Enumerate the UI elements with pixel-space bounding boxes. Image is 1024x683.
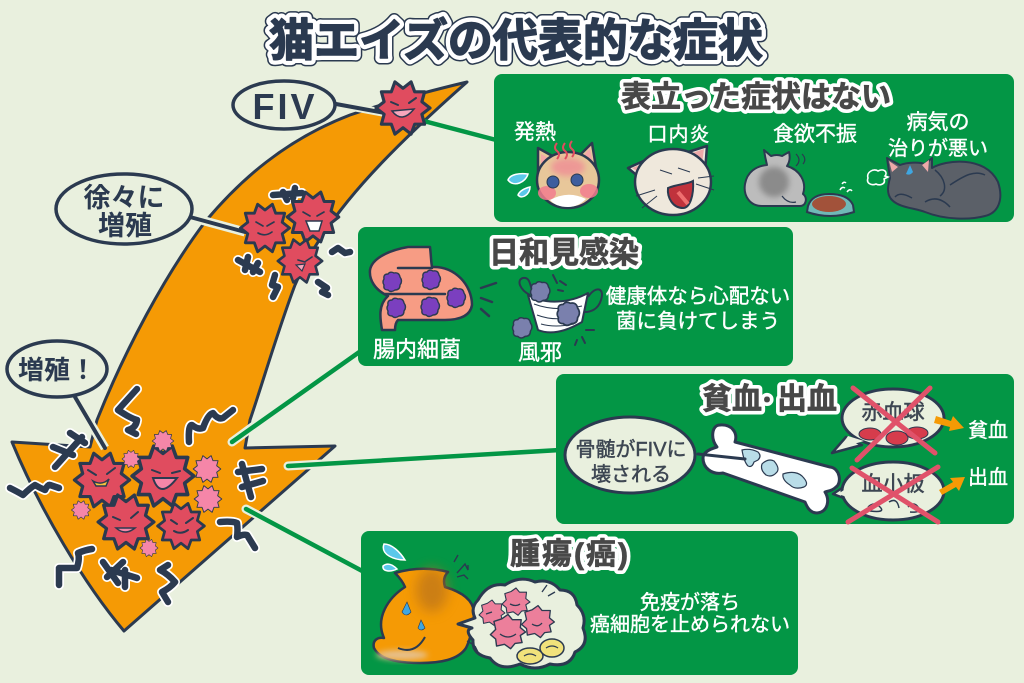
label: FIV: FIV <box>252 86 318 127</box>
heading: anemia and bleeding: 出血 <box>777 383 837 416</box>
label: proliferation <box>7 341 107 448</box>
squiggle marks <box>10 188 350 602</box>
connector lines to panels <box>232 120 560 573</box>
icon: cat from behind <box>745 150 806 206</box>
heading: tumor: 腫瘍(癌) <box>510 538 630 571</box>
label: slow to heal: 治りが悪い <box>888 137 988 160</box>
icon: breath puff <box>868 170 888 185</box>
text: healthy bodies fine <box>606 285 790 333</box>
text: immunity falls: 免疫が落ち <box>640 591 740 614</box>
label: slow to heal <box>888 111 988 160</box>
heading: anemia and bleeding: 貧血 <box>702 383 762 416</box>
text: healthy bodies fine: 健康体なら心配ない <box>606 285 790 308</box>
label: gradual growth: 徐々に <box>84 183 164 213</box>
label: anemia: 貧血 <box>968 419 1008 442</box>
callout: bone marrow destroyed: 骨髄がFIVに <box>575 438 687 461</box>
heading: no obvious symptoms: 表立った症状はない <box>621 81 891 114</box>
heading: anemia and bleeding: ・ <box>757 390 777 412</box>
callout: bone marrow destroyed <box>565 417 695 493</box>
viruses: gradual growth <box>240 192 339 282</box>
callout: red blood cells crossed out: 赤血球 <box>862 401 924 424</box>
marks: emphasis lines <box>481 283 496 316</box>
icon: mask <box>513 275 602 345</box>
heading: opportunistic infection: 日和見感染 <box>489 237 639 270</box>
label: gut bacteria: 腸内細菌 <box>373 337 461 362</box>
heading: anemia and bleeding: ・ <box>757 390 777 412</box>
icon: feverish cat <box>537 141 599 208</box>
arrow: disease progression <box>12 82 467 631</box>
label: gradual growth: 増殖 <box>98 211 152 241</box>
callout: platelets crossed out <box>833 462 944 522</box>
icon: sweat drops <box>508 174 530 197</box>
panel: anemia and bleeding <box>556 374 1014 524</box>
heading: tumor: 腫瘍(癌) <box>510 538 630 571</box>
text: healthy bodies fine: 菌に負けてしまう <box>616 310 780 333</box>
panel: opportunistic infection <box>358 227 793 366</box>
label: gradual growth <box>56 174 245 244</box>
heading: anemia and bleeding <box>702 383 837 416</box>
label: bleeding: 出血 <box>968 466 1008 489</box>
arrow: to bleeding <box>939 477 965 495</box>
heading: no obvious symptoms: 表立った症状はない <box>621 81 891 114</box>
callout: red blood cells crossed out <box>832 388 944 460</box>
label: loss of appetite: 食欲不振 <box>773 123 857 146</box>
label: cold: 風邪 <box>518 340 562 365</box>
arrow: to anemia <box>934 416 964 431</box>
heading: anemia and bleeding: 貧血 <box>702 383 762 416</box>
label: fever: 発熱 <box>514 121 556 144</box>
label: FIV <box>233 81 385 129</box>
callout: cancer cells cloud <box>458 579 585 668</box>
icon: worried orange cat <box>374 555 474 663</box>
icon: bone <box>698 425 839 513</box>
text: immunity falls: 癌細胞を止められない <box>590 613 790 636</box>
virus: FIV top <box>376 82 430 134</box>
label: slow to heal: 病気の <box>906 111 970 134</box>
title: 猫エイズの代表的な症状 <box>269 15 763 66</box>
title: 猫エイズの代表的な症状 <box>269 15 763 66</box>
icon: sick dark cat <box>887 158 1000 219</box>
label: stomatitis: 口内炎 <box>648 123 710 146</box>
panel: tumor <box>361 531 798 675</box>
panel: no obvious symptoms <box>494 74 1014 222</box>
icon: intestine <box>370 247 472 330</box>
callout: platelets crossed out: 血小板 <box>862 473 924 496</box>
icon: food bowl <box>807 182 854 216</box>
text: immunity falls <box>590 591 790 636</box>
icon: cat with mouth sores <box>628 146 714 215</box>
heading: anemia and bleeding: 出血 <box>777 383 837 416</box>
virus cluster <box>71 431 222 557</box>
title: 猫エイズの代表的な症状 <box>269 15 763 66</box>
label: proliferation: 増殖！ <box>18 355 96 385</box>
heading: opportunistic infection: 日和見感染 <box>489 237 639 270</box>
callout: bone marrow destroyed: 壊される <box>591 463 671 486</box>
icon: sweat drops <box>383 544 405 571</box>
